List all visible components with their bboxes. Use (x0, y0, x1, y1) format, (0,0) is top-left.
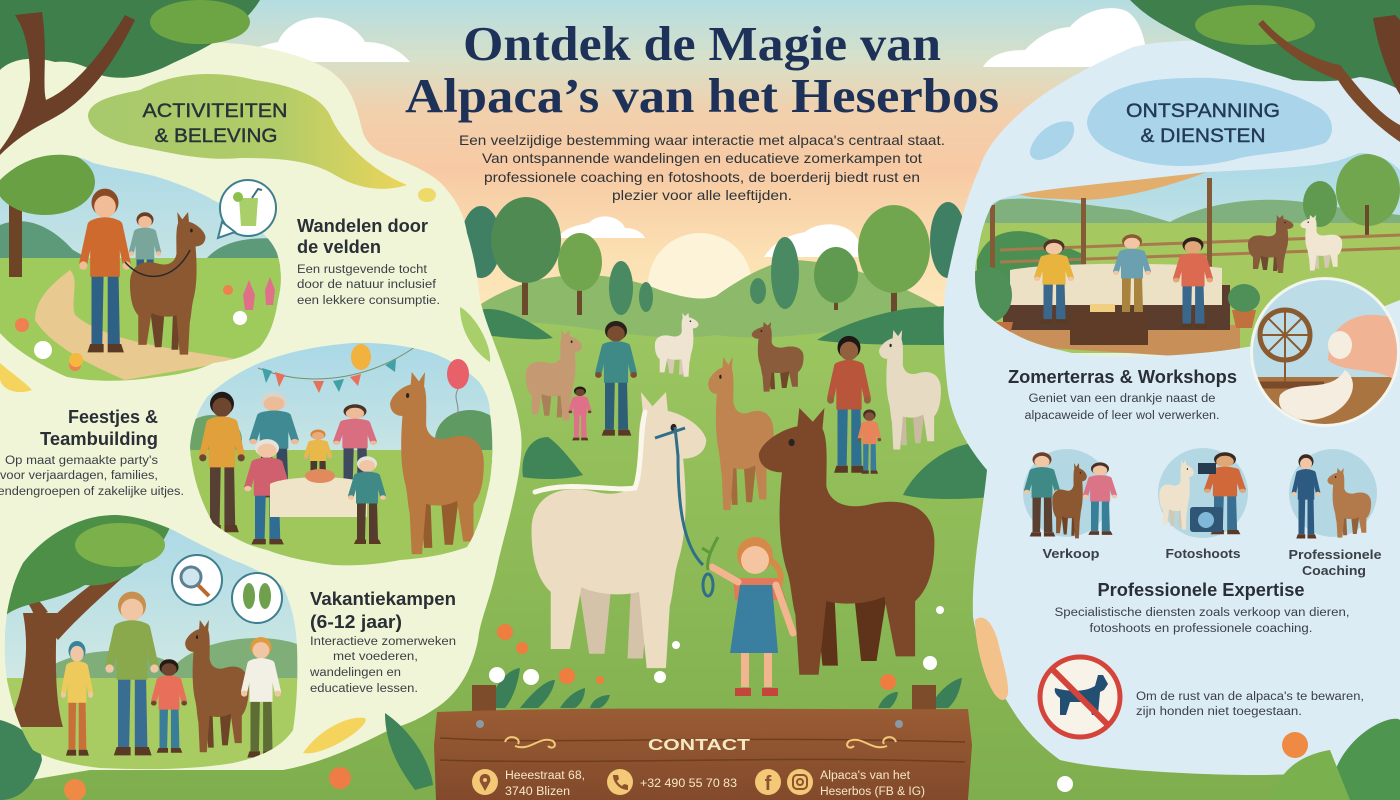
icon: facebook (755, 769, 781, 795)
meadow flowers (488, 606, 962, 708)
bottom foliage (0, 307, 1400, 800)
text: professionele expertise: fotoshoots en professionele coaching. (1090, 623, 1312, 635)
address (505, 770, 585, 798)
text: vakantiekampen: met voederen, (333, 651, 418, 663)
text: vakantiekampen (309, 589, 456, 695)
text: wandelen: de velden (297, 237, 381, 257)
text: feestjes: Feestjes & (68, 407, 158, 427)
text: wandelen: Wandelen door (297, 216, 428, 236)
intro text: professionele coaching en fotoshoots, de boerderij biedt rust en (484, 169, 920, 185)
phone number: +32 490 55 70 83 (640, 778, 737, 790)
text: vakantiekampen: Vakantiekampen (310, 589, 456, 609)
label: verkoop: Verkoop (1042, 546, 1100, 561)
address: 3740 Blizen (505, 786, 570, 798)
label: coaching (1288, 547, 1382, 578)
text: wandelen: door de natuur inclusief (297, 279, 437, 291)
contact heading: CONTACT (648, 737, 750, 754)
intro text: Een veelzijdige bestemming waar interactie met alpaca's centraal staat. (459, 132, 945, 148)
small alpacas and family in the meadow (526, 313, 941, 510)
social handle (820, 770, 925, 798)
party balloons (351, 344, 469, 418)
background trees (440, 197, 966, 400)
central meadow (0, 318, 1400, 800)
text: feestjes (0, 407, 184, 498)
icon: fotoshoots (1158, 448, 1248, 538)
heading: activiteiten en beleving: & BELEVING (154, 126, 278, 147)
social handle: Alpaca's van het (820, 770, 911, 782)
ornaments (505, 737, 555, 748)
text: feestjes: Op maat gemaakte party's (5, 455, 158, 467)
scene: zomerterras (964, 150, 1400, 365)
text: professionele expertise: Specialistische diensten zoals verkoop van dieren, (1054, 607, 1350, 619)
large brown alpaca (759, 408, 934, 675)
scene: workshop (1245, 275, 1400, 435)
scene: wandelen (0, 154, 281, 381)
wooden board (434, 709, 972, 800)
icon: verkoop (1023, 449, 1117, 538)
label: fotoshoots: Fotoshoots (1166, 546, 1240, 561)
text: professionele expertise (1054, 580, 1350, 635)
title (405, 16, 999, 123)
background sky (0, 0, 1400, 340)
icon: no dogs (1040, 657, 1120, 737)
heading: ontspanning en diensten (1030, 78, 1332, 166)
text: zomerterras (1008, 367, 1237, 422)
text: wandelen: een lekkere consumptie. (297, 295, 440, 307)
text: zomerterras: Geniet van een drankje naast de (1028, 393, 1216, 405)
heading: activiteiten en beleving (88, 74, 436, 202)
right panel background (944, 41, 1400, 775)
sun (648, 233, 752, 337)
text: vakantiekampen: (6-12 jaar) (310, 612, 402, 632)
girl with leaf (702, 537, 793, 696)
text: feestjes: voor verjaardagen, families, (0, 470, 158, 482)
heading: activiteiten en beleving: ACTIVITEITEN (142, 101, 288, 122)
bushes (480, 305, 990, 499)
text: professionele expertise: Professionele Expertise (1098, 580, 1304, 600)
heading: ontspanning en diensten: & DIENSTEN (1140, 126, 1266, 147)
title: Ontdek de Magie van (463, 16, 941, 71)
halter and lead (655, 427, 703, 565)
text: vakantiekampen: wandelingen en (309, 667, 401, 679)
drink bubble (218, 180, 276, 238)
corner tree: left (0, 0, 260, 155)
scene: vakantiekampen (0, 510, 300, 775)
title: Alpaca’s van het Heserbos (405, 68, 999, 123)
text: wandelen (297, 216, 440, 307)
clouds (240, 8, 1147, 257)
intro text: Van ontspannende wandelingen en educatieve zomerkampen tot (482, 150, 922, 166)
text: vakantiekampen: Interactieve zomerweken (310, 636, 456, 648)
icon: instagram (787, 769, 813, 795)
intro text: plezier voor alle leeftijden. (612, 187, 792, 203)
text: no dogs (1136, 691, 1364, 718)
large cream alpaca (532, 392, 706, 668)
label: coaching: Coaching (1302, 563, 1366, 578)
text: feestjes: Teambuilding (40, 429, 158, 449)
text: no dogs: Om de rust van de alpaca's te bewaren, (1136, 691, 1364, 703)
text: no dogs: zijn honden niet toegestaan. (1136, 706, 1302, 718)
intro text (459, 132, 945, 203)
text: zomerterras: alpacaweide of leer wol verwerken. (1024, 410, 1220, 422)
icon: phone (607, 769, 633, 795)
sign posts (472, 685, 936, 713)
contact sign (434, 685, 972, 800)
heading: ontspanning en diensten: ONTSPANNING (1126, 101, 1280, 122)
text: zomerterras: Zomerterras & Workshops (1008, 367, 1237, 387)
social handle: Heserbos (FB & IG) (820, 786, 925, 798)
icon: facebook: f (765, 773, 772, 795)
corner tree: right (1130, 0, 1400, 142)
left panel background (0, 30, 522, 780)
icon: location (472, 769, 498, 795)
address: Heeestraat 68, (505, 770, 585, 782)
icon bubbles (172, 555, 282, 623)
icon: coaching (1289, 449, 1377, 539)
scene: feestjes (180, 340, 505, 570)
label: coaching: Professionele (1288, 547, 1382, 562)
text: wandelen: Een rustgevende tocht (297, 264, 428, 276)
text: vakantiekampen: educatieve lessen. (310, 683, 418, 695)
